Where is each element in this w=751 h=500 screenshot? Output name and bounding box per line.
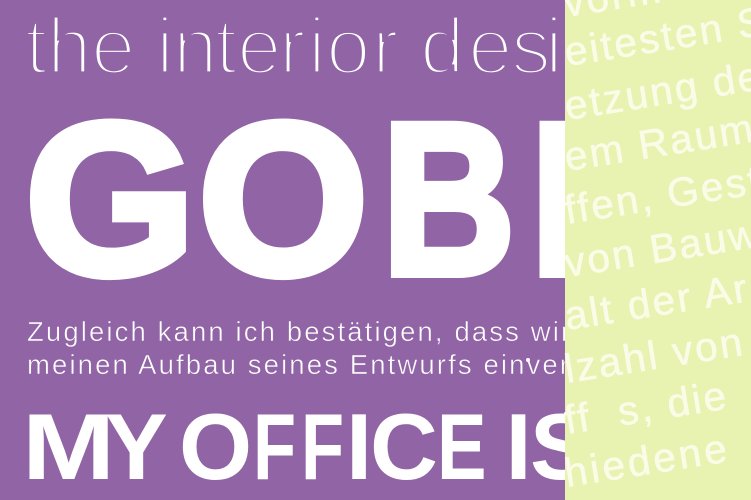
heading: MY OFFICE IS: O <box>179 394 252 499</box>
heading: MY OFFICE IS <box>29 414 565 480</box>
rotated body text <box>560 0 751 496</box>
title: GOBI: G <box>25 79 195 321</box>
heading: the interior design: the interior desi <box>25 2 563 90</box>
heading: MY OFFICE IS: S <box>530 394 593 499</box>
title: GOBI: I <box>529 78 589 320</box>
heading: MY OFFICE IS: E <box>437 394 487 499</box>
rotated body text: ff s, die <box>561 372 731 443</box>
heading: MY OFFICE IS: Y <box>105 394 168 499</box>
rotated body text: lzahl von <box>561 318 748 392</box>
title: GOBI: O <box>198 79 368 321</box>
heading: MY OFFICE IS: C <box>370 394 438 499</box>
title: GOBI: B <box>382 78 515 320</box>
rotated body text: alt der Ar <box>561 264 751 339</box>
body text: two lines: Zugleich kann ich bestätigen, dass wir <box>27 316 572 347</box>
rotated body text: hiedene <box>561 424 733 496</box>
body text: two lines <box>28 321 565 374</box>
left text column <box>28 18 565 480</box>
heading: MY OFFICE IS: F <box>301 394 344 499</box>
panel: pale green text sample <box>560 0 751 500</box>
body text: two lines: meinen Aufbau seines Entwurfs einver <box>27 349 571 380</box>
title: GOBI <box>30 118 565 280</box>
heading: MY OFFICE IS: F <box>253 394 296 499</box>
heading: MY OFFICE IS: I <box>506 394 532 499</box>
heading: MY OFFICE IS: I <box>346 394 372 499</box>
dot above v <box>526 358 530 362</box>
heading: MY OFFICE IS: M <box>22 393 115 499</box>
